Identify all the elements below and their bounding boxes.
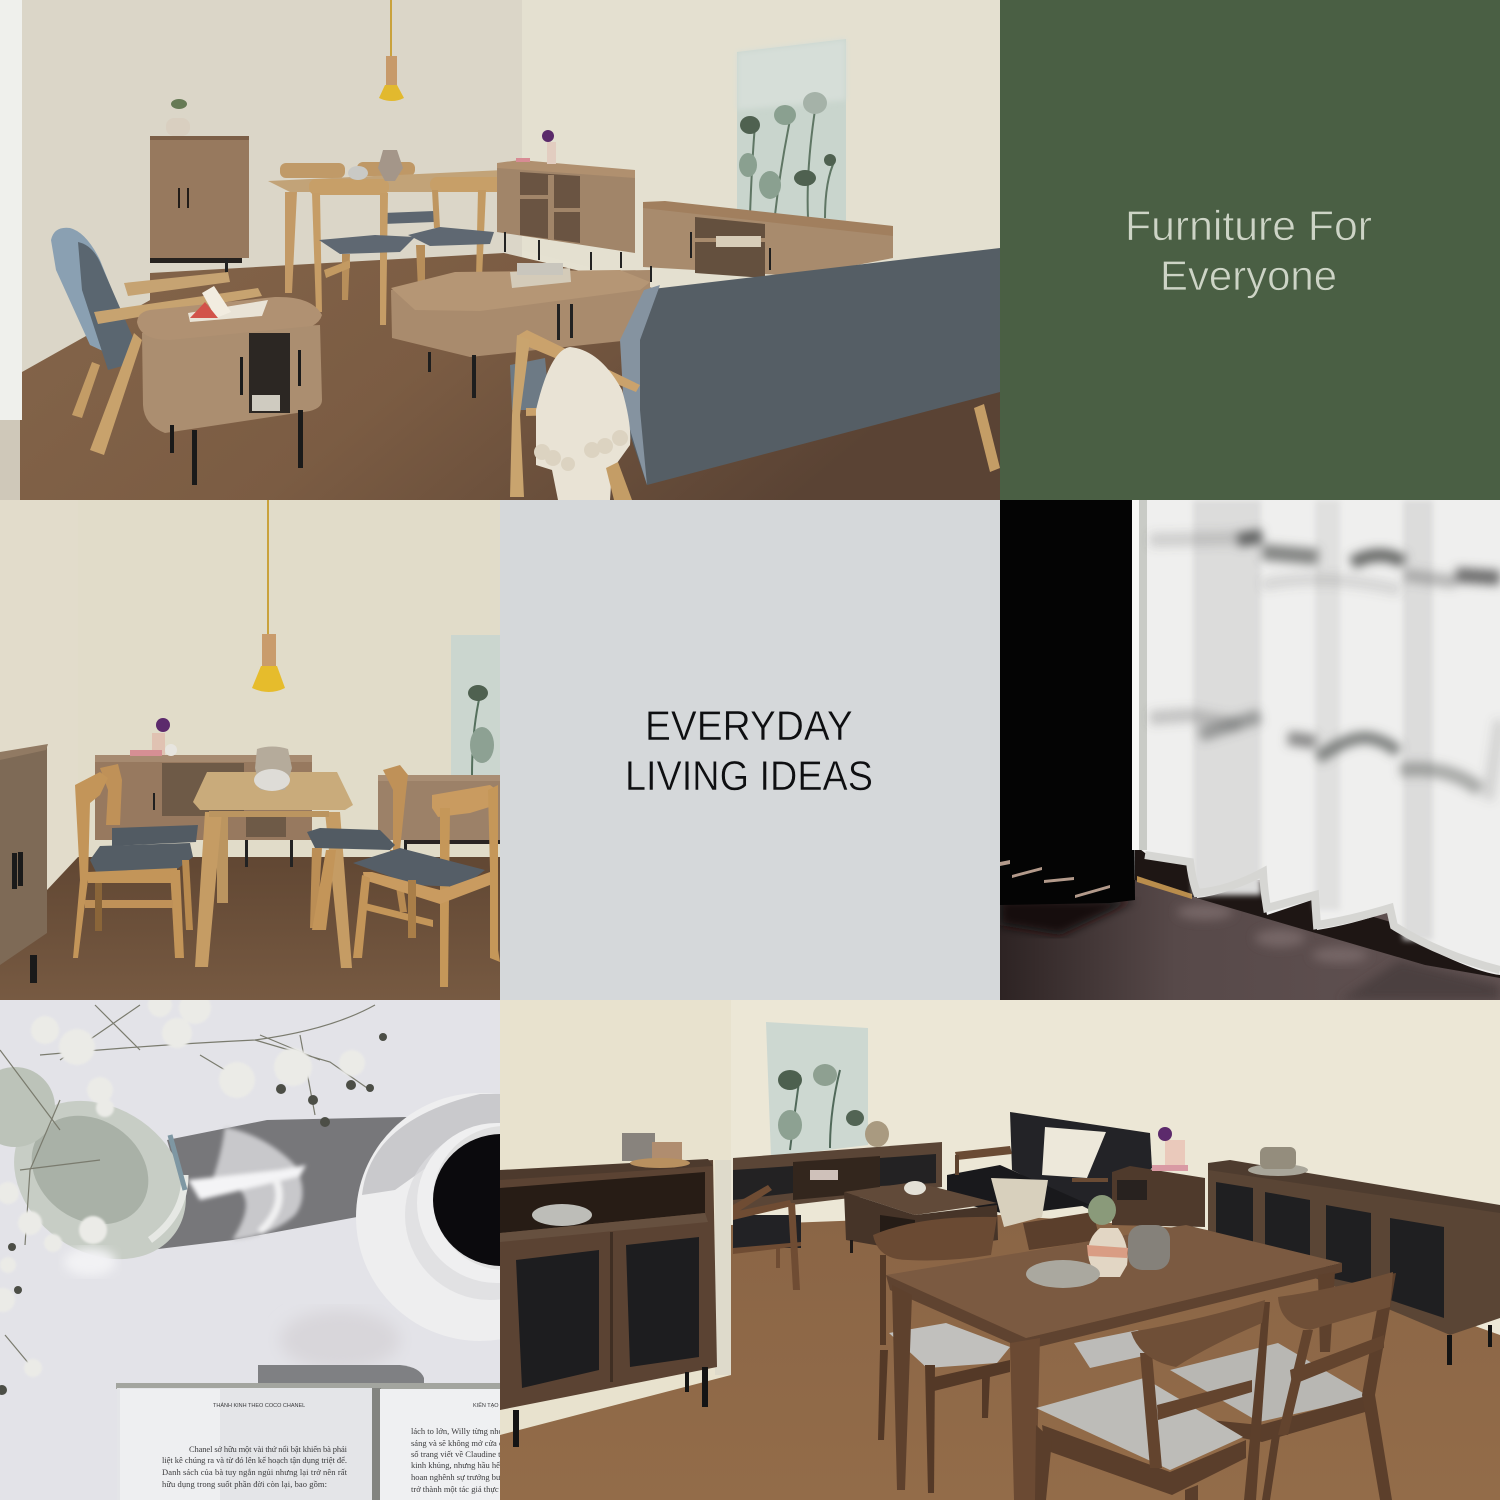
right chairs	[307, 765, 500, 987]
book page text: trở thành một tác giả thực	[411, 1484, 499, 1494]
tv console	[643, 201, 893, 282]
tv console	[733, 1121, 942, 1212]
sheer white curtain	[1132, 500, 1500, 975]
rear chairs	[873, 1212, 1157, 1493]
panel: dining nook photo	[0, 500, 500, 1000]
left chairs	[73, 764, 198, 958]
title: furniture for everyone: Everyone	[1160, 252, 1337, 299]
dining table	[193, 746, 353, 968]
right sideboard	[378, 775, 500, 857]
side cabinet	[137, 286, 322, 485]
armchair	[733, 1185, 801, 1290]
title: furniture for everyone: Furniture For	[1125, 202, 1372, 249]
title: everyday living ideas: EVERYDAY	[645, 702, 853, 749]
long sideboard	[1208, 1147, 1500, 1365]
panel: curtain photo	[1000, 500, 1500, 1000]
shelf cabinet	[500, 1133, 717, 1447]
black drape	[1000, 500, 1135, 905]
lounge chair	[51, 228, 262, 455]
book page text: THÁNH KINH THEO COCO CHANEL	[213, 1402, 305, 1409]
book page text: sáng và sẽ không mở cửa ch	[411, 1438, 508, 1448]
back sideboard	[497, 130, 635, 270]
book page text: hoan nghênh sự trưởng bước đ	[411, 1472, 516, 1482]
panel: oak living room photo	[0, 0, 1000, 500]
title: everyday living ideas: LIVING IDEAS	[625, 752, 873, 799]
coffee table	[391, 263, 650, 398]
table shadow	[150, 1117, 407, 1250]
back sideboard	[95, 718, 312, 867]
glass vase	[0, 1067, 188, 1275]
open book	[116, 1365, 516, 1500]
book page text: lách to lớn, Willy từng nhớ	[411, 1426, 503, 1436]
wall painting	[766, 1022, 868, 1157]
front chairs	[1035, 1272, 1396, 1500]
panel: coffee and book flat lay photo	[0, 1000, 500, 1500]
book page text: hữu dụng trong suốt phần đời còn lại, bao gồm:	[162, 1479, 327, 1489]
wall painting	[451, 635, 500, 775]
book page text: Danh sách của bà tuy ngắn ngủi nhưng lại trở nên rất	[162, 1467, 348, 1477]
dining set	[268, 150, 507, 325]
side cabinet	[1112, 1127, 1205, 1227]
book page text	[162, 1402, 516, 1494]
black sofa	[947, 1112, 1152, 1227]
pendant lamp	[379, 0, 404, 101]
left cabinet	[0, 744, 48, 983]
book page text: kinh khủng, nhưng hầu hết c	[411, 1460, 508, 1470]
tall sideboard	[150, 99, 249, 279]
coffee table	[844, 1181, 998, 1253]
book page text: Chanel sở hữu một vài thứ nổi bật khiến bà phải	[189, 1444, 348, 1454]
drape hem highlights	[1000, 860, 1110, 898]
grey sofa	[510, 248, 1000, 500]
gypsophila flowers	[0, 992, 387, 1395]
book page text: liệt kê chúng ra và từ đó lên kế hoạch tận dụng triệt để.	[162, 1455, 347, 1465]
book page text: KIẾN TẠO	[473, 1402, 499, 1409]
dining table	[886, 1195, 1342, 1500]
panel: green title block	[1000, 0, 1500, 500]
book page text: số trang viết về Claudine tro	[411, 1449, 508, 1459]
wall painting	[737, 39, 846, 221]
panel: grey title block	[500, 500, 1000, 1000]
panel: walnut dining room photo	[500, 1000, 1500, 1500]
coffee cup and saucer	[356, 1093, 500, 1341]
yellow pendant lamp	[252, 500, 285, 692]
